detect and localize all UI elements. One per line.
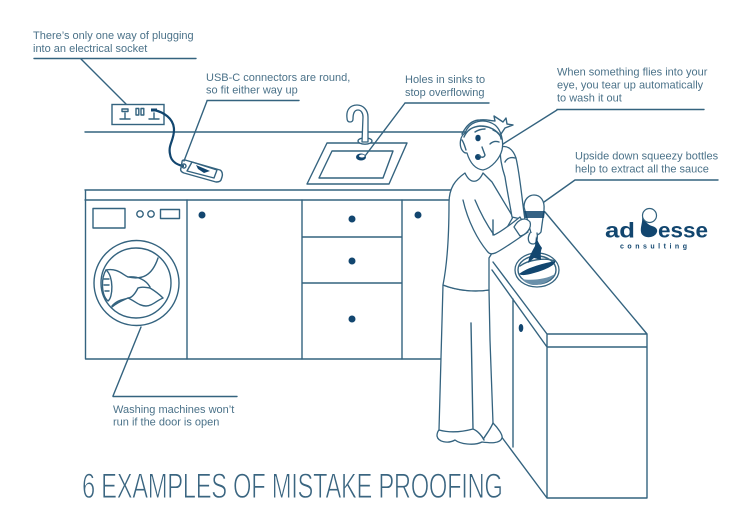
callout: washing machine door: Washing machines won’t [113, 404, 234, 416]
callout: sink holes: Holes in sinks to [405, 74, 485, 86]
callout: electrical socket: There’s only one way of plugging [33, 30, 194, 42]
electrical socket [112, 104, 164, 124]
logo: adesse consulting [605, 208, 708, 250]
title: 6 EXAMPLES OF MISTAKE PROOFING [82, 468, 503, 506]
head [460, 121, 503, 170]
bottle [524, 195, 544, 235]
callout: squeezy bottles: help to extract all the sauce [575, 164, 709, 176]
callout: USB-C: so fit either way up [206, 84, 298, 96]
logo: adesse consulting: esse [658, 220, 708, 242]
torso [443, 173, 513, 291]
plate of food [515, 253, 559, 287]
sauce stream [528, 236, 542, 263]
legs [437, 285, 502, 444]
plughole [356, 154, 366, 160]
callout: washing machine door: run if the door is open [113, 416, 219, 428]
callout: washing machine door [113, 327, 237, 428]
callout: eye tears: to wash it out [557, 92, 622, 104]
callout: eye tears: eye, you tear up automatically [557, 80, 704, 92]
callout: eye tears: When something flies into your [557, 66, 708, 78]
callout: eye tears [503, 66, 708, 144]
callout: squeezy bottles: Upside down squeezy bottles [575, 150, 719, 162]
person [437, 116, 559, 444]
cabinet knobs [198, 212, 523, 332]
front arm [463, 200, 528, 254]
callout: squeezy bottles [544, 150, 719, 202]
washing machine [93, 208, 180, 326]
sink and tap [307, 105, 407, 184]
logo: adesse consulting: consulting [620, 244, 687, 250]
raised arm [500, 146, 525, 220]
logo: adesse consulting: ad [605, 220, 635, 242]
fingers [514, 219, 530, 236]
callout: sink holes: stop overflowing [405, 87, 484, 99]
side counter [492, 212, 647, 498]
callout: electrical socket [33, 30, 196, 104]
callout: USB-C: USB-C connectors are round, [206, 72, 350, 84]
callout: sink holes [365, 74, 489, 156]
USB cable and connector [154, 110, 222, 182]
callout: electrical socket: into an electrical socket [33, 43, 147, 55]
callout: USB-C [184, 72, 350, 161]
kitchen counter and cabinets [85, 132, 647, 498]
